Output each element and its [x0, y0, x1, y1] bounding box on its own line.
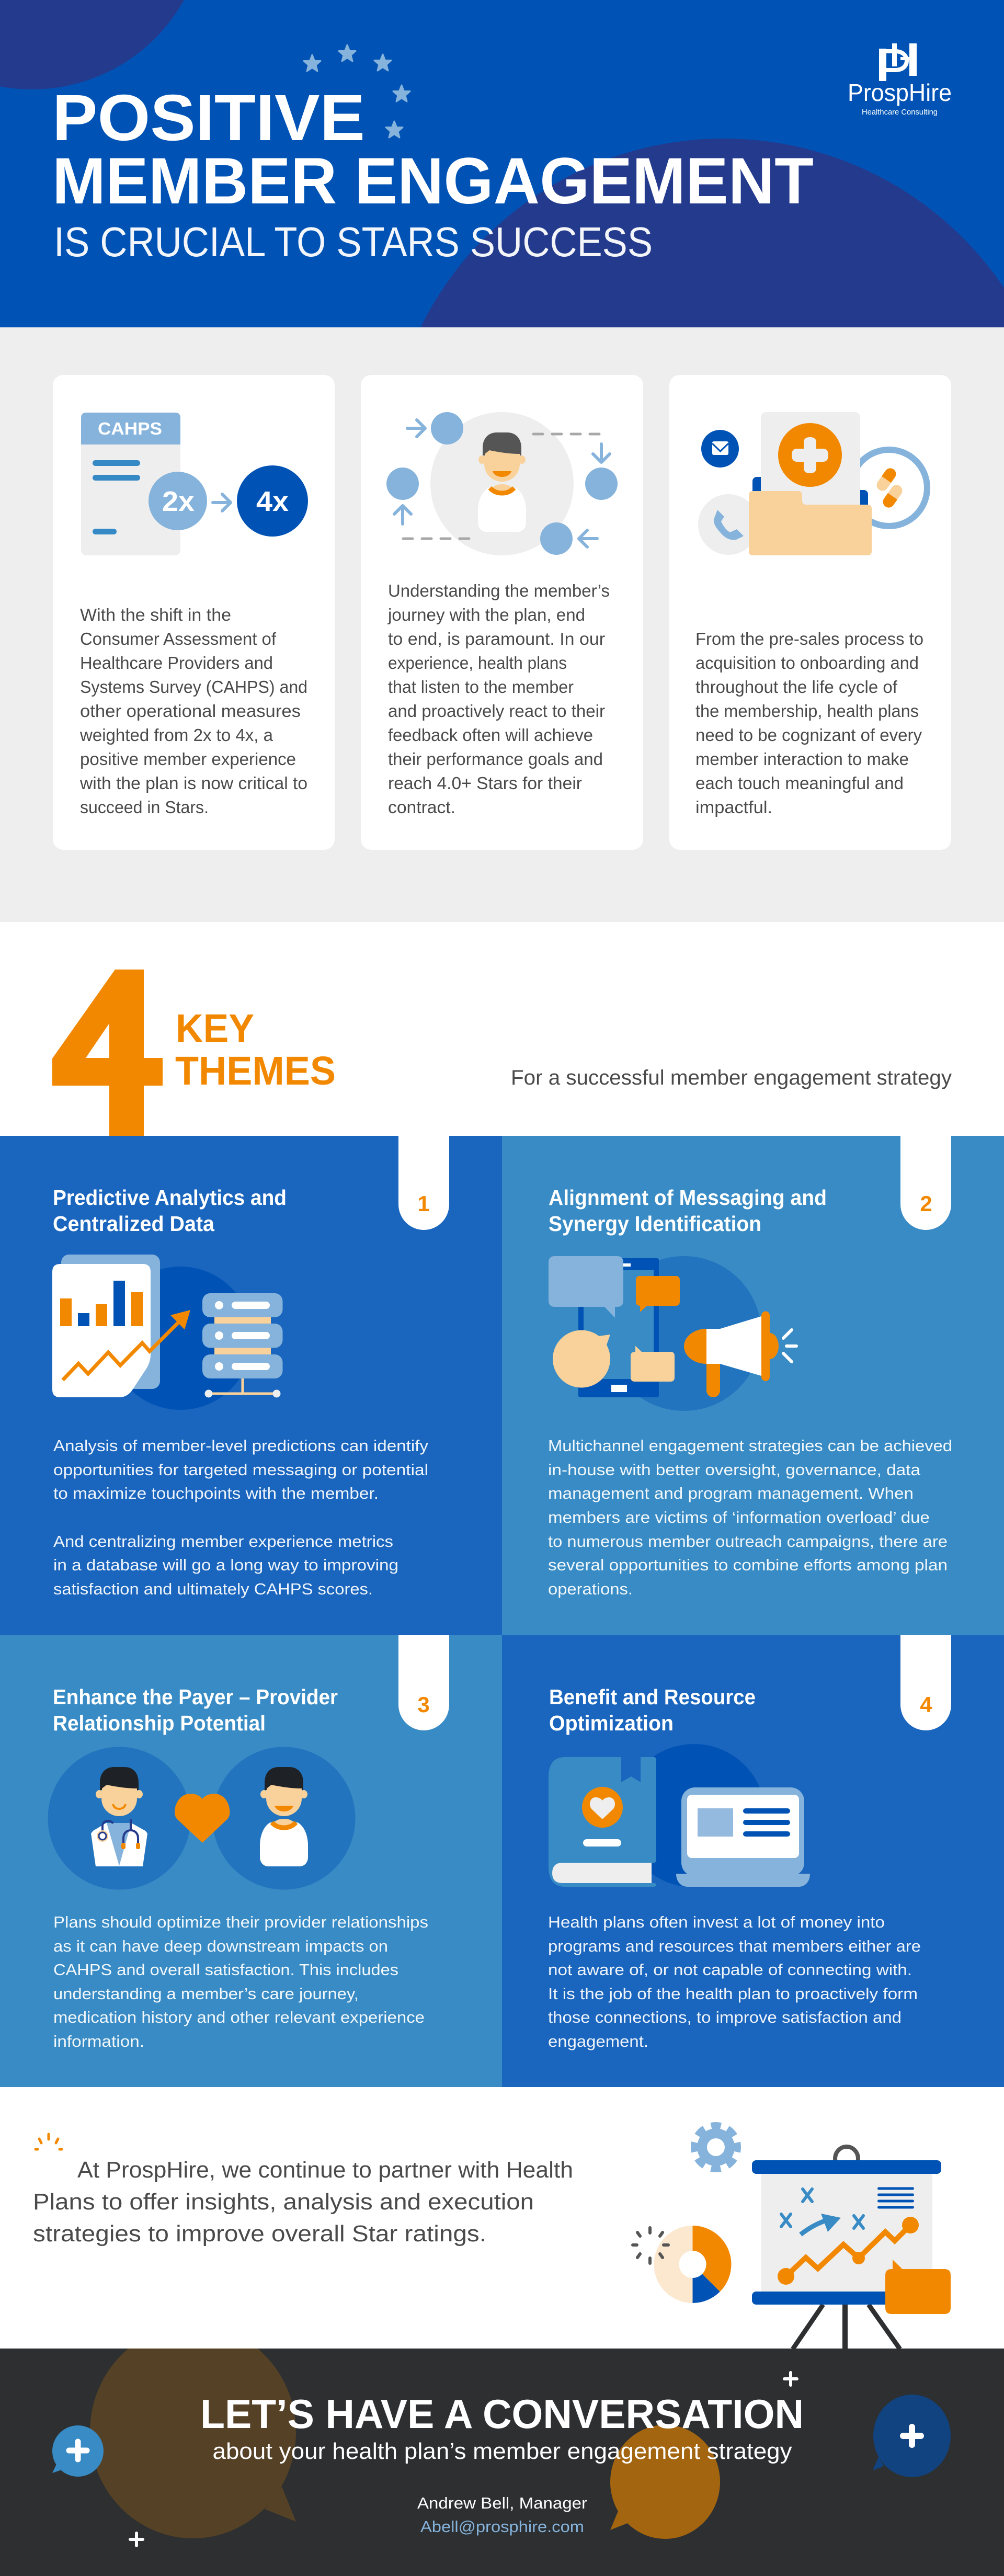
text: theme 4 body	[548, 1913, 921, 2050]
text: theme 2 body: members are victims of ‘information overload’ due	[548, 1508, 930, 1526]
text: card 3 body: acquisition to onboarding and	[695, 653, 919, 673]
text: card 3 body: member interaction to make	[695, 749, 909, 769]
heading: theme 2: Synergy Identification	[549, 1212, 761, 1236]
text: theme 1 body	[53, 1437, 429, 1598]
panel: intro section background	[0, 327, 1004, 922]
text: theme 3 body: Plans should optimize their provider relationships	[53, 1913, 428, 1931]
text: conclusion statement: At ProspHire, we continue to partner with Health	[77, 2157, 573, 2183]
text: card 3 body: need to be cognizant of every	[695, 725, 922, 745]
text: theme 3 body: information.	[53, 2032, 144, 2050]
text: theme 3 body: medication history and other relevant experience	[53, 2008, 425, 2026]
text: card 2 body: that listen to the member	[388, 677, 574, 697]
subtitle: IS CRUCIAL TO STARS SUCCESS	[54, 219, 653, 265]
text: card 1 body: Healthcare Providers and	[80, 653, 273, 673]
text: card 1 body: other operational measures	[80, 701, 301, 721]
text: theme 2 body: several opportunities to combine efforts among plan	[548, 1556, 948, 1574]
text: card 2 body: journey with the plan, end	[387, 605, 585, 624]
text: theme 2 body: management and program management. When	[548, 1484, 914, 1502]
illustration: presentation board	[752, 2147, 951, 2349]
icon: book and laptop	[549, 1744, 810, 1887]
icon: light blue chat bubble with plus	[52, 2425, 104, 2477]
heading: theme 1: Centralized Data	[53, 1212, 215, 1236]
logo: ProspHire	[848, 79, 952, 106]
heading: 4 key themes	[52, 970, 952, 1136]
text: theme 1 body: And centralizing member experience metrics	[53, 1532, 393, 1551]
text: theme 1 body: satisfaction and ultimately CAHPS scores.	[53, 1580, 373, 1598]
text: theme 3 body: understanding a member’s care journey,	[53, 1985, 359, 2003]
icon: CAHPS document with 2x to 4x: CAHPS	[98, 419, 162, 438]
chart: donut	[654, 2226, 731, 2303]
heading: theme 3: Relationship Potential	[53, 1711, 266, 1735]
text: card 3 body: From the pre-sales process to	[695, 629, 923, 648]
text: theme 4 body: not aware of, or not capable of connecting with.	[548, 1961, 912, 1979]
heading: theme 4	[549, 1685, 756, 1735]
number tab 1	[398, 1136, 449, 1230]
icon: small plus marks	[130, 2373, 797, 2546]
text: conclusion statement: Plans to offer insights, analysis and execution	[33, 2189, 534, 2215]
header banner	[0, 0, 1004, 327]
text: theme 4 body: programs and resources that members either are	[548, 1937, 921, 1955]
heading text: key themes: KEY	[176, 1006, 254, 1051]
logo: Healthcare Consulting	[862, 108, 938, 117]
icon: report chart and server	[52, 1255, 282, 1410]
panel: card 2 member journey	[361, 375, 643, 850]
heading: call to action: LET’S HAVE A CONVERSATION	[200, 2391, 804, 2437]
text: card 1 body: succeed in Stars.	[80, 797, 209, 817]
text: theme 3 body: CAHPS and overall satisfaction. This includes	[53, 1961, 398, 1979]
icon: medical folder with contact channels	[698, 412, 927, 555]
title: MEMBER ENGAGEMENT	[52, 145, 814, 218]
text: theme 3 body: as it can have deep downstream impacts on	[53, 1937, 388, 1955]
text: card 3 body: throughout the life cycle of	[695, 677, 898, 697]
text: card 1 body: Systems Survey (CAHPS) and	[80, 677, 307, 697]
text: contact name: Andrew Bell, Manager	[417, 2494, 587, 2512]
number tab 1: 1	[417, 1191, 430, 1216]
text: theme 3 body	[53, 1913, 428, 2050]
icon: gear	[695, 2126, 737, 2168]
text: card 1 body: Consumer Assessment of	[80, 629, 277, 648]
heading: theme 3: Enhance the Payer – Provider	[53, 1685, 338, 1709]
text: card 1 body: positive member experience	[80, 749, 296, 769]
icon: CAHPS document with 2x to 4x: 2x	[162, 486, 195, 517]
heading: theme 4: Benefit and Resource	[549, 1685, 756, 1709]
text: theme 2 body: operations.	[548, 1580, 633, 1598]
heading: theme 2: Alignment of Messaging and	[549, 1186, 827, 1210]
text: card 3 body: the membership, health plans	[695, 701, 919, 721]
heading text: key themes: THEMES	[175, 1048, 336, 1093]
text: theme 1 body: opportunities for targeted messaging or potential	[53, 1461, 428, 1479]
number tab 4: 4	[920, 1692, 932, 1717]
text: card 2 body: their performance goals and	[388, 749, 603, 769]
icon: large numeral four	[52, 970, 163, 1136]
panel: card 3 touchpoints	[669, 375, 951, 850]
text: card 2 body: reach 4.0+ Stars for their	[388, 773, 582, 793]
text: card 2 body	[387, 581, 610, 817]
text: card 3 body: each touch meaningful and	[695, 773, 904, 793]
icon: phone bubbles and megaphone	[549, 1256, 796, 1411]
text: theme 1 body: in a database will go a long way to improving	[53, 1556, 398, 1574]
icon: CAHPS document with 2x to 4x: 4x	[256, 486, 289, 517]
text: card 2 body: to end, is paramount. In our	[388, 629, 605, 648]
icon: arc of stars	[304, 45, 410, 138]
heading: theme 1: Predictive Analytics and	[53, 1186, 287, 1210]
number tab 4	[900, 1635, 951, 1730]
text: theme 4 body: Health plans often invest a lot of money into	[548, 1913, 885, 1931]
title: POSITIVE	[52, 82, 365, 154]
text: card 2 body: contract.	[388, 797, 455, 817]
icon: dark blue chat bubble with plus	[873, 2395, 951, 2477]
figure: doctor	[91, 1767, 147, 1866]
text: contact email: Abell@prosphire.com	[420, 2517, 584, 2536]
text: card 2 body: experience, health plans	[388, 653, 567, 673]
icon: brown speech bubble	[90, 2349, 296, 2538]
text: theme 4 body: engagement.	[548, 2032, 648, 2050]
heading: theme 4: Optimization	[549, 1711, 674, 1735]
heading: theme 1	[53, 1186, 287, 1236]
text: theme 1 body: Analysis of member-level predictions can identify	[53, 1437, 429, 1455]
text: conclusion statement: strategies to improve overall Star ratings.	[33, 2221, 486, 2247]
panel: theme 3 payer provider relationship	[0, 1635, 502, 2087]
text: conclusion statement	[33, 2157, 573, 2247]
number tab 2	[900, 1136, 951, 1230]
panel: conclusion	[33, 2126, 951, 2349]
text: card 3 body	[695, 629, 923, 817]
icon: orange speech bubble	[610, 2425, 720, 2539]
number tab 3: 3	[417, 1692, 430, 1717]
heading: theme 3	[53, 1685, 338, 1735]
heading text: key themes	[175, 1006, 336, 1093]
icon: member journey cycle	[386, 412, 618, 555]
panel: theme 4 benefit optimization	[502, 1635, 1004, 2087]
text: theme 4 body: It is the job of the health plan to proactively form	[548, 1985, 918, 2003]
icon: orange spark	[36, 2134, 62, 2149]
logo	[848, 43, 952, 117]
text: card 1 body: with the plan is now critical to	[79, 773, 307, 793]
figure: member	[260, 1767, 308, 1866]
text: theme 2 body	[548, 1437, 952, 1598]
text: card 1 body	[79, 605, 307, 817]
number tab 3	[398, 1635, 449, 1730]
text: card 2 body: feedback often will achieve	[388, 725, 593, 745]
title	[52, 82, 814, 218]
text: card 1 body: weighted from 2x to 4x, a	[79, 725, 273, 745]
panel: footer call to action	[0, 2325, 1004, 2576]
icon: CAHPS document with 2x to 4x	[81, 413, 308, 555]
text: card 2 body: Understanding the member’s	[388, 581, 610, 600]
text: strategy tagline: For a successful member engagement strategy	[511, 1066, 952, 1089]
heading: theme 2	[549, 1186, 827, 1236]
text: call to action subtitle: about your health plan’s member engagement strategy	[212, 2438, 792, 2464]
text: card 2 body: and proactively react to their	[388, 701, 605, 721]
text: card 1 body: With the shift in the	[80, 605, 231, 624]
text: theme 2 body: in-house with better oversight, governance, data	[548, 1461, 921, 1479]
text: theme 2 body: Multichannel engagement strategies can be achieved	[548, 1437, 952, 1455]
text: theme 1 body: to maximize touchpoints with the member.	[53, 1484, 379, 1502]
text: theme 2 body: to numerous member outreach campaigns, there are	[548, 1532, 948, 1551]
icon: gray spark	[633, 2228, 668, 2263]
panel: theme 1 predictive analytics	[0, 1136, 502, 1635]
text: card 3 body: impactful.	[695, 797, 772, 817]
icon: doctor heart and member	[48, 1747, 356, 1890]
panel: card 1 CAHPS	[53, 375, 335, 850]
text: theme 4 body: those connections, to improve satisfaction and	[548, 2008, 902, 2026]
panel: theme 2 messaging alignment	[502, 1136, 1004, 1635]
number tab 2: 2	[920, 1191, 932, 1216]
